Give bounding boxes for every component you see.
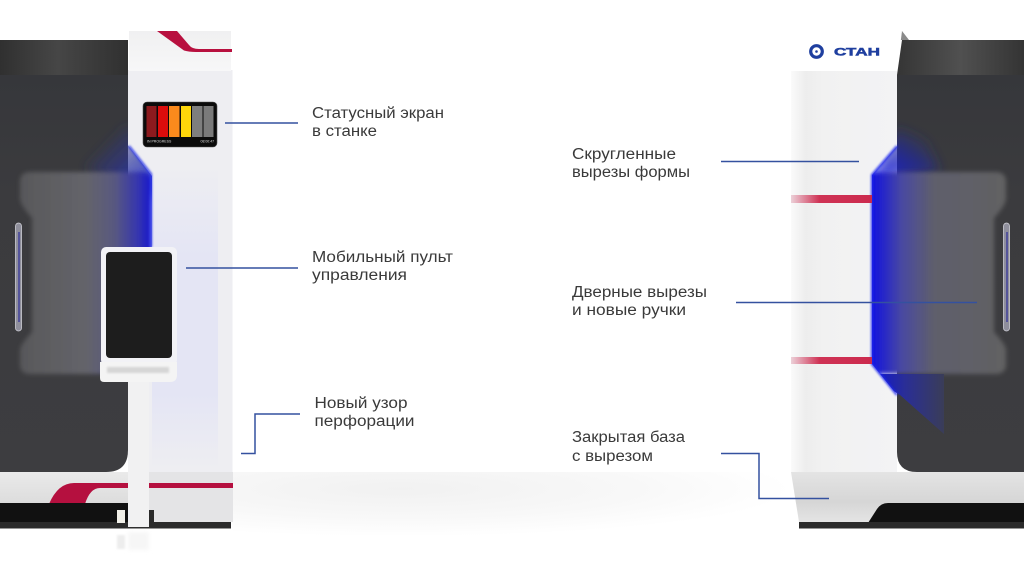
glow and window bbox=[20, 125, 160, 374]
label: rounded cutouts bbox=[572, 146, 859, 181]
door handle bbox=[1004, 223, 1010, 331]
floor shadow bbox=[232, 472, 792, 540]
door dark body bbox=[0, 75, 128, 472]
closed base bbox=[791, 472, 1024, 522]
status screen: IN PROGRESS bbox=[147, 140, 172, 144]
black base bbox=[868, 503, 1024, 523]
stand bbox=[128, 378, 149, 527]
logo: СТАН bbox=[834, 46, 880, 58]
panel edge blue light bbox=[872, 146, 897, 395]
label: status screen: в станке bbox=[312, 123, 377, 140]
label: status screen bbox=[225, 105, 444, 140]
label: mobile pendant: управления bbox=[312, 267, 407, 284]
panel edge blue light bbox=[129, 146, 151, 247]
label: closed base: Закрытая база bbox=[572, 429, 685, 446]
glow and window bbox=[866, 128, 1006, 434]
label: closed base: с вырезом bbox=[572, 448, 653, 465]
door handle bbox=[16, 223, 22, 331]
label: mobile pendant: Мобильный пульт bbox=[312, 249, 453, 266]
lower white panel bbox=[0, 472, 128, 504]
label: door cutouts: Дверные вырезы bbox=[572, 284, 707, 301]
label: closed base bbox=[572, 429, 829, 498]
roof band bbox=[897, 40, 1024, 75]
machine right bbox=[791, 31, 1024, 528]
label: door cutouts: и новые ручки bbox=[572, 302, 686, 319]
red stripes bbox=[791, 195, 872, 203]
side panel bbox=[128, 70, 232, 522]
label: mobile pendant bbox=[186, 249, 453, 284]
floor reflections bbox=[117, 532, 149, 550]
panel lavender tint bbox=[152, 165, 218, 470]
top cap bbox=[129, 31, 231, 71]
label: perforation bbox=[241, 395, 414, 454]
label: perforation: Новый узор bbox=[314, 395, 408, 412]
machine left bbox=[0, 31, 233, 528]
shelf bbox=[100, 362, 177, 382]
logo bbox=[811, 46, 880, 58]
mobile control pendant bbox=[100, 247, 177, 527]
label: status screen: Статусный экран bbox=[312, 105, 444, 122]
label: perforation: перфорации bbox=[314, 413, 414, 430]
roof band bbox=[0, 40, 128, 75]
label: rounded cutouts: вырезы формы bbox=[572, 164, 690, 181]
label: rounded cutouts: Скругленные bbox=[572, 146, 676, 163]
status screen: 08:00:47 bbox=[200, 140, 214, 144]
red stripe bbox=[49, 483, 233, 504]
label: door cutouts bbox=[572, 284, 977, 319]
red accent top bbox=[157, 31, 232, 52]
tablet bbox=[101, 247, 177, 365]
top cap with logo bbox=[791, 31, 902, 71]
side panel bbox=[791, 71, 897, 472]
status screen bbox=[143, 102, 217, 147]
black base bbox=[0, 503, 128, 522]
door dark body bbox=[897, 75, 1024, 472]
